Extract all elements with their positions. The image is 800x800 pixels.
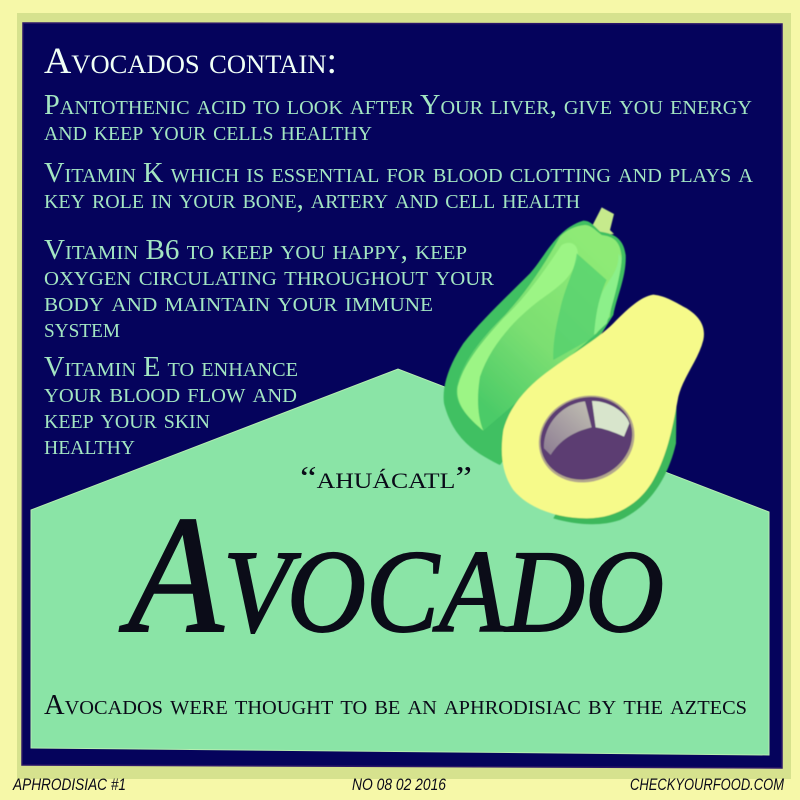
text block: vitamin K: key role in your bone, artery and cell health	[44, 184, 580, 215]
text block: pantothenic acid: Pantothenic acid to look after Your liver, give you energy	[44, 90, 752, 121]
text block: vitamin E: keep your skin	[44, 404, 210, 435]
text block: vitamin B6	[44, 235, 495, 344]
whole avocado	[444, 221, 626, 465]
footer: series label: APHRODISIAC #1	[12, 775, 126, 794]
text block: pantothenic acid: and keep your cells healthy	[44, 116, 372, 147]
heading: Avocados contain:	[44, 41, 337, 82]
text block: vitamin B6: oxygen circulating throughout your	[44, 261, 495, 292]
text block: pantothenic acid	[44, 90, 752, 147]
text block: vitamin E: healthy	[44, 430, 135, 461]
text block: vitamin E: Vitamin E to enhance	[44, 352, 298, 383]
stem	[593, 207, 614, 235]
text block: vitamin B6: body and maintain your immune	[44, 287, 433, 318]
title: Avocado	[119, 482, 664, 668]
text block: vitamin E: your blood flow and	[44, 378, 297, 409]
text block: vitamin B6: system	[44, 313, 120, 344]
footer: date: NO 08 02 2016	[352, 775, 446, 794]
halved avocado rim	[553, 390, 677, 524]
text block: vitamin K	[44, 158, 754, 215]
pronunciation label: “ahuácatl”	[300, 459, 472, 495]
panel: green envelope	[31, 369, 769, 755]
text block: vitamin E	[44, 352, 298, 461]
icon: avocado illustration	[444, 207, 704, 524]
text block: vitamin B6: Vitamin B6 to keep you happy, keep	[44, 235, 467, 266]
text block: vitamin K: Vitamin K which is essential for blood clotting and plays a	[44, 158, 754, 189]
halved avocado flesh	[502, 295, 704, 518]
caption: Avocados were thought to be an aphrodisiac by the aztecs	[44, 690, 747, 721]
pit	[526, 381, 648, 497]
